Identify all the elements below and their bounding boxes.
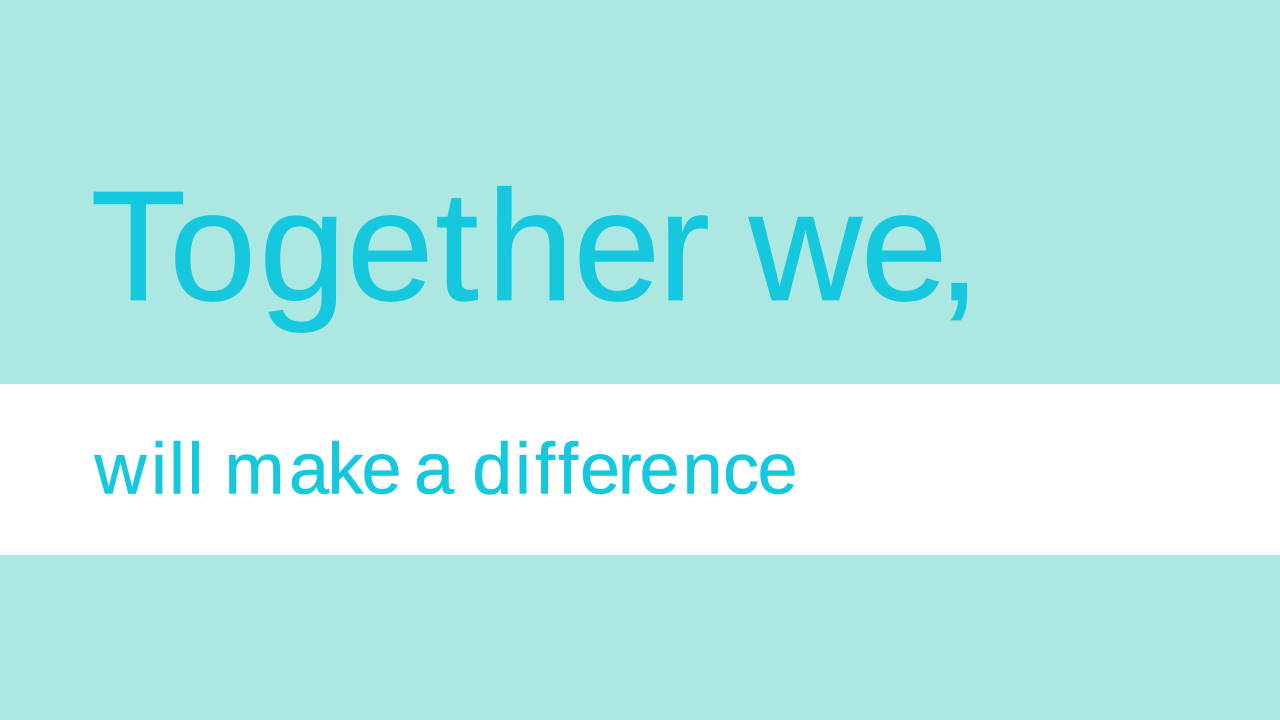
white band	[0, 384, 1280, 555]
subtitle: will make a difference	[94, 429, 798, 509]
title: Together we,	[90, 159, 981, 334]
